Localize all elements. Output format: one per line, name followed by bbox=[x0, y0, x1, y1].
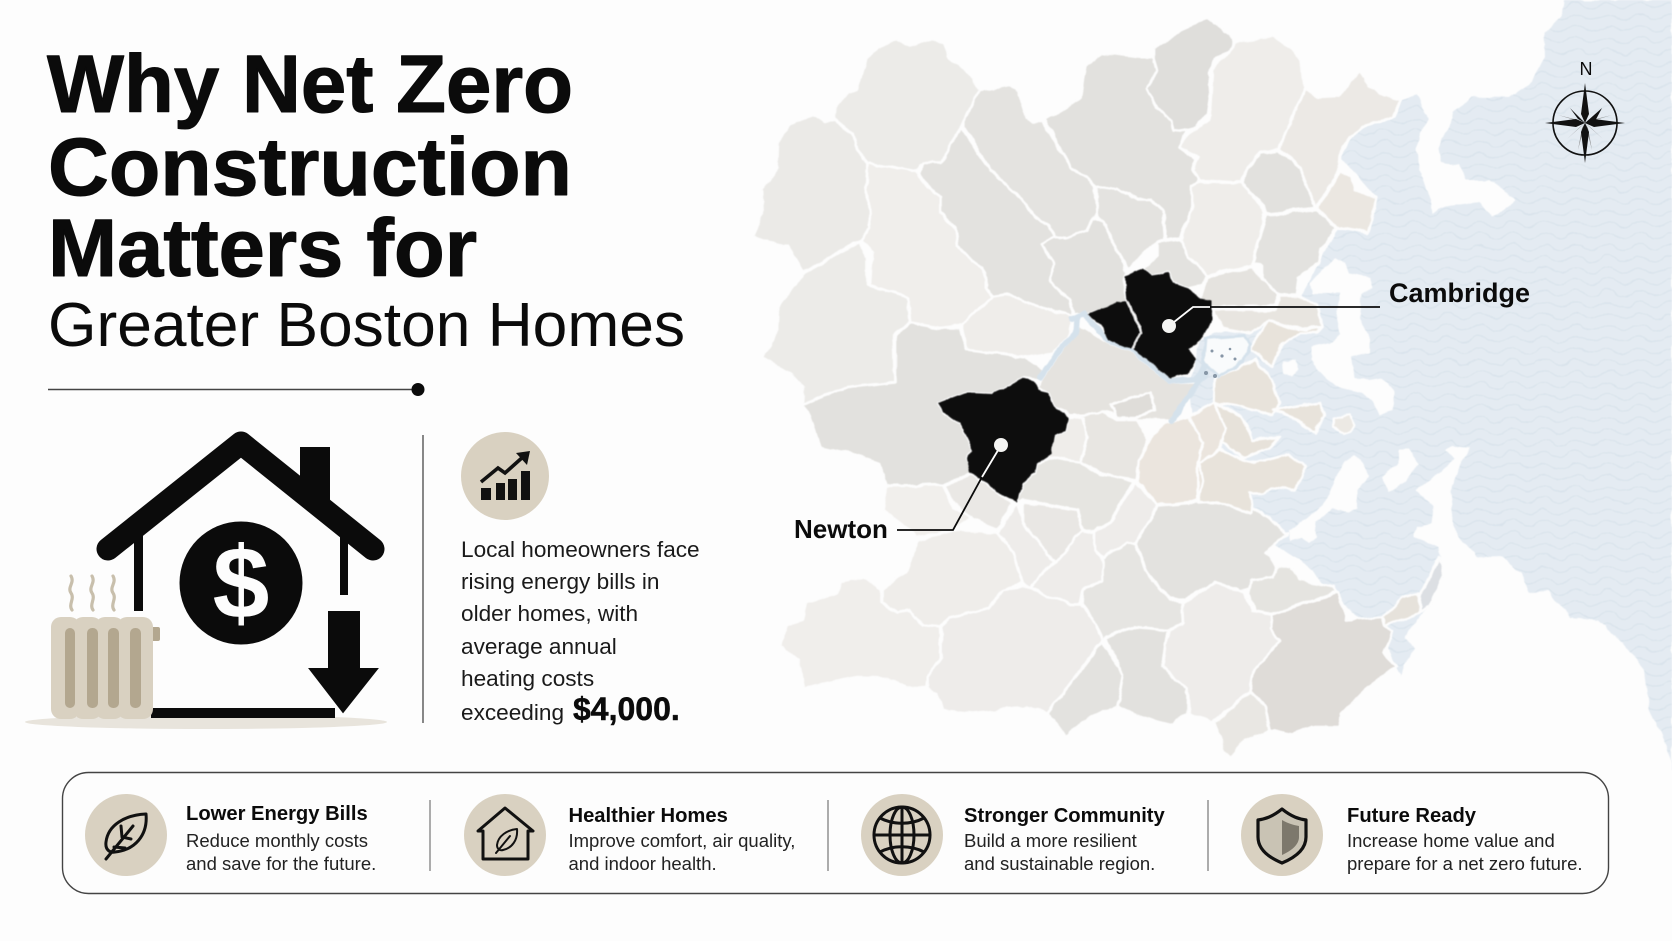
ground shadow bbox=[25, 715, 387, 729]
Charles River and Boston Harbor bbox=[1040, 313, 1250, 420]
benefit: lower energy bills bbox=[85, 794, 376, 876]
compass rose bbox=[1545, 59, 1625, 163]
benefit: healthier homes: Healthier Homes bbox=[568, 805, 728, 827]
compass rose: N bbox=[1580, 59, 1592, 79]
chimney bbox=[300, 447, 330, 505]
harbor islands bbox=[1198, 310, 1236, 378]
dollar coin: $ bbox=[213, 526, 269, 640]
panel: benefits bbox=[62, 772, 1608, 894]
municipalities bbox=[753, 18, 1444, 758]
title rule with dot bbox=[48, 383, 424, 396]
benefit: stronger community: Build a more resilient bbox=[964, 830, 1137, 851]
benefit: future ready bbox=[1241, 794, 1582, 876]
heat steam bbox=[70, 576, 114, 610]
Newton callout bbox=[794, 438, 1008, 544]
benefit: future ready: prepare for a net zero future. bbox=[1347, 853, 1582, 874]
text block: energy bills: older homes, with bbox=[461, 601, 638, 626]
text block: energy bills: $4,000. bbox=[573, 691, 680, 727]
text block: energy bills bbox=[461, 537, 700, 727]
radiator bbox=[51, 617, 160, 719]
benefit: healthier homes bbox=[464, 794, 795, 876]
title: Why Net Zero bbox=[47, 39, 573, 130]
title bbox=[47, 39, 685, 360]
icon: rising cost chart bbox=[461, 432, 549, 520]
benefit: lower energy bills: and save for the future. bbox=[186, 853, 376, 874]
benefit: lower energy bills: Lower Energy Bills bbox=[186, 803, 368, 825]
text block: energy bills: exceeding bbox=[461, 700, 564, 725]
title: Greater Boston Homes bbox=[48, 291, 685, 360]
text block: energy bills: Local homeowners face bbox=[461, 537, 700, 562]
highlighted region: Cambridge bbox=[1088, 268, 1213, 378]
dollar coin bbox=[180, 522, 302, 644]
sea with wave texture bbox=[1190, 0, 1672, 770]
Cambridge callout: Cambridge bbox=[1389, 278, 1530, 308]
title: Construction bbox=[48, 122, 572, 213]
house roof bbox=[108, 443, 373, 549]
benefit: healthier homes: and indoor health. bbox=[568, 853, 717, 874]
down arrow bbox=[306, 610, 381, 715]
text block: energy bills: heating costs bbox=[461, 666, 594, 691]
benefit: stronger community: and sustainable region. bbox=[964, 853, 1155, 874]
map: Greater Boston bbox=[753, 0, 1672, 941]
text block: energy bills: average annual bbox=[461, 634, 617, 659]
coastal white land and islands bbox=[1200, 257, 1672, 941]
icon: house with dollar, radiator and down arrow bbox=[25, 443, 387, 729]
highlighted region: Newton bbox=[938, 378, 1068, 502]
benefit: stronger community bbox=[861, 794, 1166, 876]
vertical divider bbox=[422, 435, 424, 723]
benefit: healthier homes: Improve comfort, air quality, bbox=[568, 830, 795, 851]
benefit: lower energy bills: Reduce monthly costs bbox=[186, 830, 368, 851]
Cambridge callout bbox=[1162, 278, 1530, 333]
title: Matters for bbox=[48, 203, 477, 294]
benefit: future ready: Future Ready bbox=[1347, 805, 1477, 827]
text block: energy bills: rising energy bills in bbox=[461, 569, 659, 594]
benefit: future ready: Increase home value and bbox=[1347, 830, 1555, 851]
Newton callout: Newton bbox=[794, 514, 888, 544]
house walls bbox=[134, 533, 348, 718]
benefit: stronger community: Stronger Community bbox=[964, 805, 1166, 827]
